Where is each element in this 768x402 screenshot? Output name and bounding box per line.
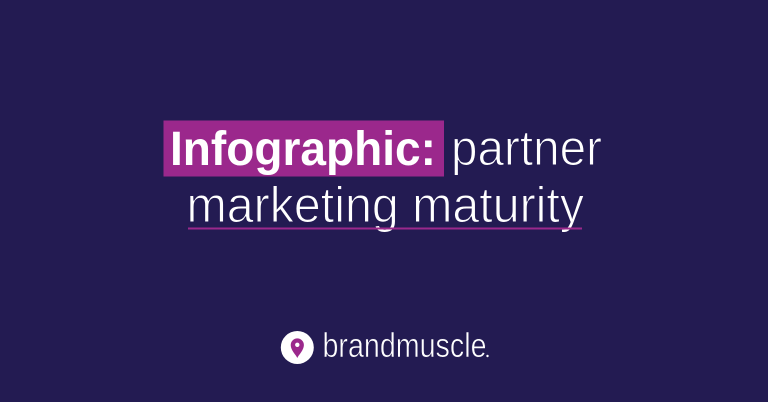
title highlight box — [164, 120, 444, 176]
brand name: brandmuscle — [322, 327, 486, 365]
title line two: marketing maturity — [186, 177, 584, 233]
icon: map pin in circle — [281, 331, 314, 364]
title word: partner: partner — [451, 120, 602, 176]
logo — [281, 327, 489, 365]
title — [164, 120, 602, 233]
title word: Infographic: Infographic: — [170, 123, 436, 176]
title underline — [188, 228, 582, 230]
brand period — [486, 355, 489, 357]
